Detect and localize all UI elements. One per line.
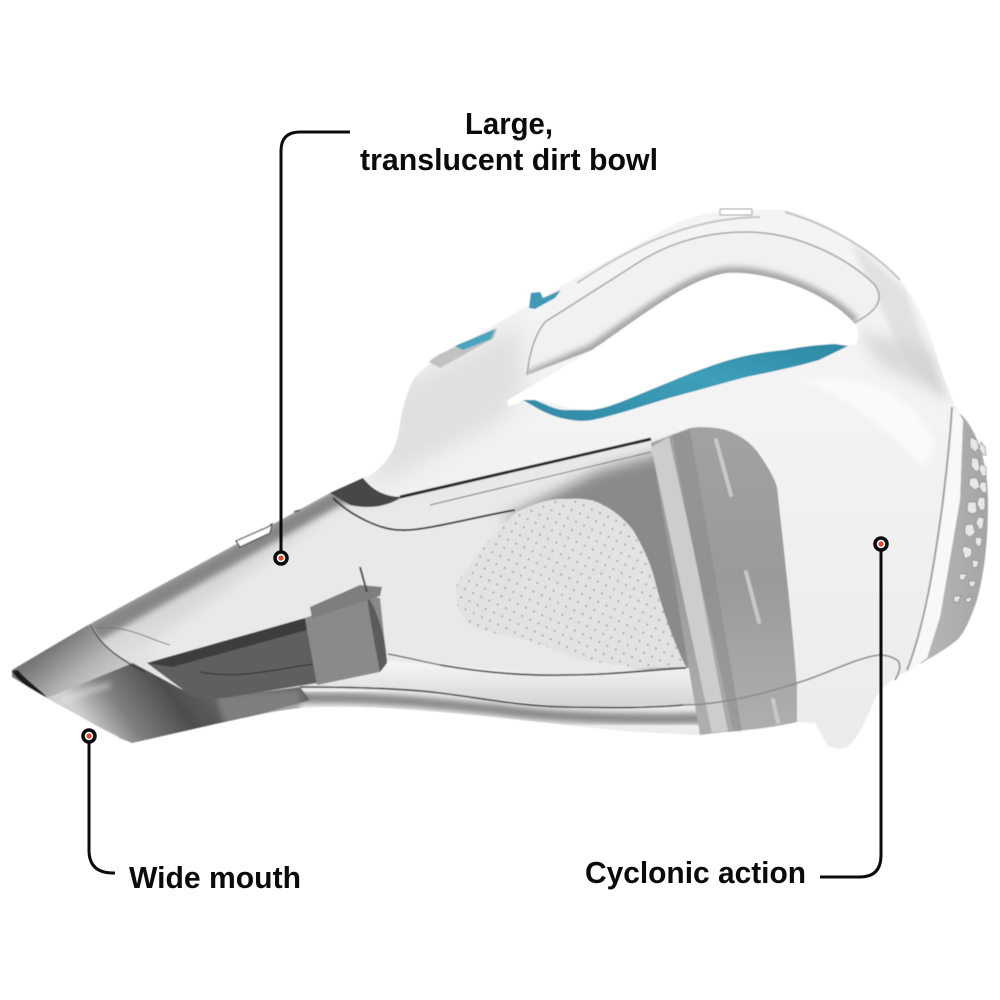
neck shading (370, 240, 950, 490)
handle opening (507, 273, 858, 410)
main white body and handle (363, 210, 963, 749)
vacuum cleaner product (0, 209, 988, 750)
inner tube (147, 567, 387, 699)
handle top tag (720, 209, 752, 215)
lower seam line (683, 655, 900, 705)
rear grille (920, 412, 988, 664)
marker dot (875, 538, 887, 550)
leader line (281, 132, 350, 552)
heading: translucent dirt bowl (360, 142, 658, 177)
label tags (236, 510, 300, 547)
nose seam (90, 625, 145, 672)
upper bowl rim (333, 498, 515, 530)
inner shadow behind bag (500, 445, 700, 680)
heading: Large, (465, 106, 553, 141)
handle top trim (577, 212, 900, 283)
leader line (89, 741, 115, 873)
gray rear cap (651, 427, 797, 735)
rear seam (907, 407, 952, 670)
heading: Cyclonic action (585, 855, 806, 890)
nose lower (47, 663, 310, 745)
marker dot (275, 552, 287, 564)
heading: Wide mouth (129, 860, 301, 895)
dust filter bag (456, 499, 686, 668)
lower band shadow (230, 698, 720, 719)
marker dot (83, 730, 95, 742)
lower band (384, 662, 694, 707)
rear band (909, 410, 963, 670)
nose upper (12, 625, 132, 698)
top dark band (88, 492, 350, 642)
leader line (820, 550, 881, 877)
callout: cyclonic action (585, 538, 887, 890)
bowl body tone (220, 504, 394, 604)
handle grip panel (527, 232, 879, 378)
nose fade (215, 690, 300, 725)
callout: large translucent dirt bowl (275, 106, 658, 564)
power switch (429, 290, 561, 368)
translucent dirt bowl (11, 438, 700, 744)
teal grip insert (523, 344, 848, 421)
callout: wide mouth (83, 730, 301, 895)
